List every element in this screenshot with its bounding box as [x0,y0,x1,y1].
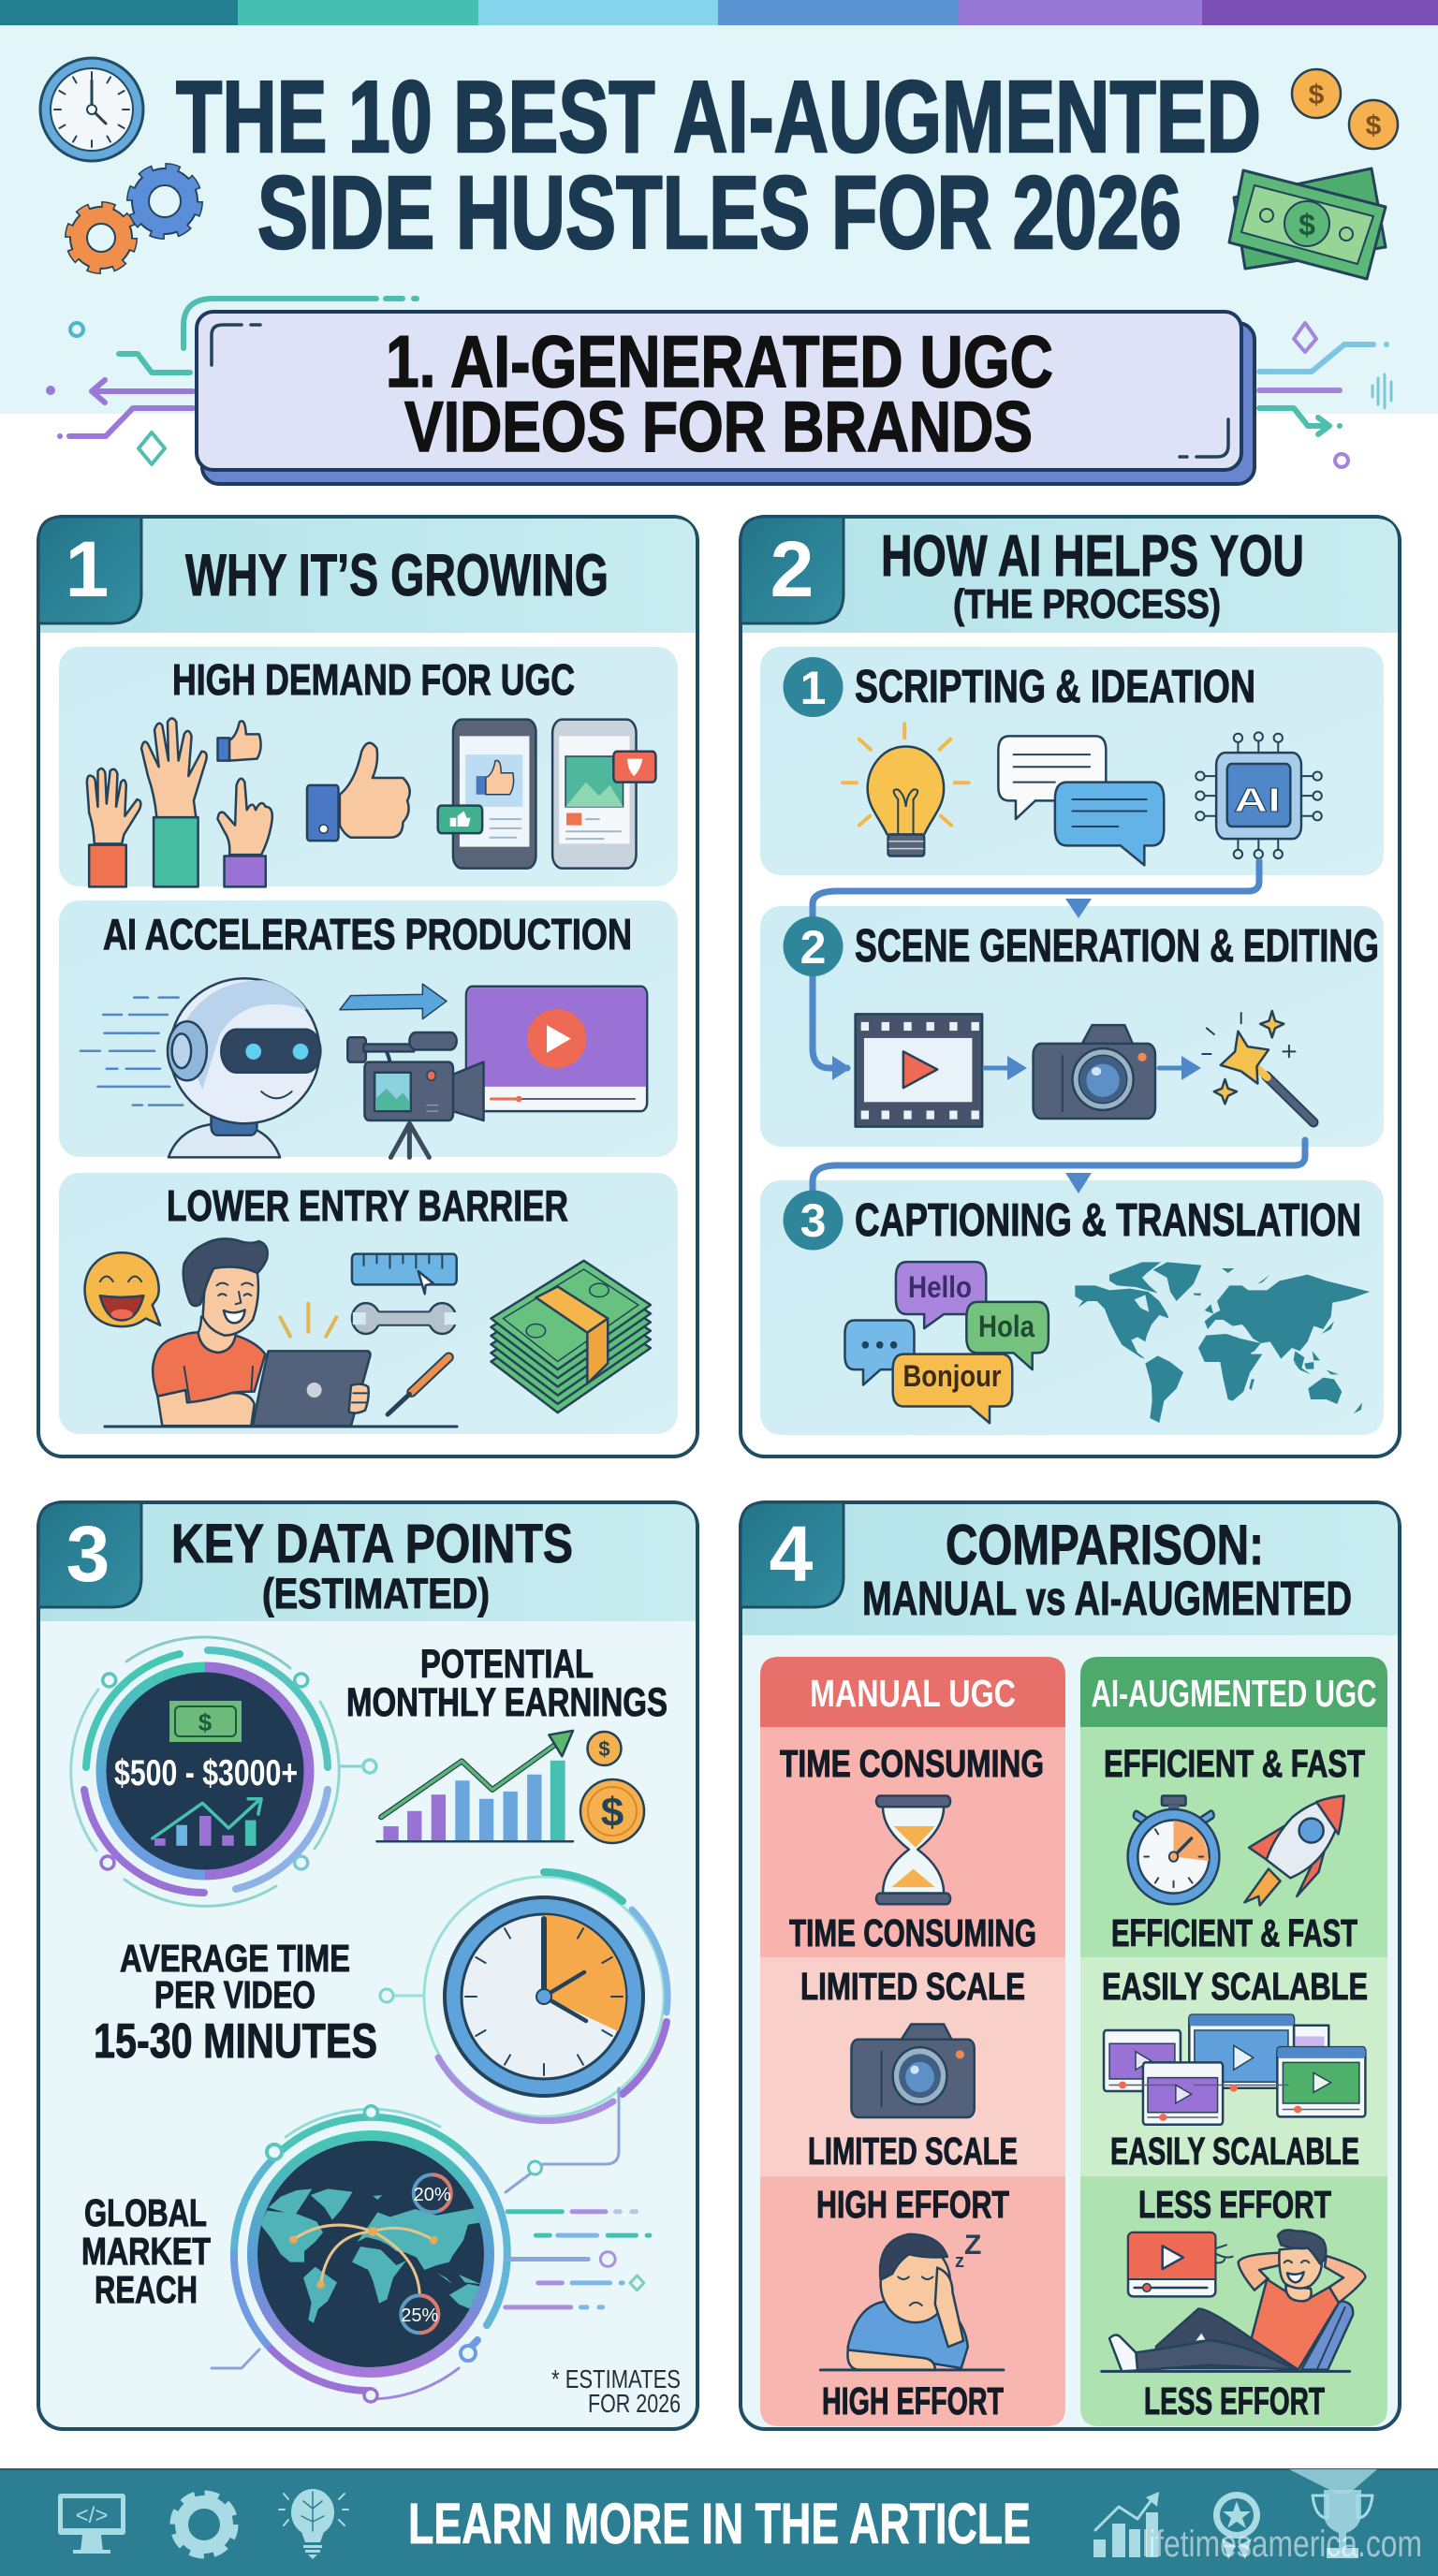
panel 1 header: WHY IT’S GROWING [185,543,609,608]
icon: language speech bubbles: Hola [978,1310,1034,1343]
panel 3 header: 3 [66,1510,110,1598]
icon: video camera on tripod [347,1032,484,1157]
card: scripting and ideation: SCRIPTING & IDEATION [855,662,1255,712]
card: scripting and ideation [760,647,1384,875]
icon: dollar bills: $ [1299,208,1315,242]
footnote [551,2364,681,2418]
icon: wall clock [40,58,143,161]
icon: film strip [856,1014,982,1127]
footer call to action: LEARN MORE IN THE ARTICLE [408,2492,1031,2555]
icon: man at laptop [153,1238,371,1426]
icon: hourglass [876,1796,950,1904]
icon: ruler, wrench and screwdriver [352,1254,458,1414]
icon: tired man: z [955,2251,964,2272]
step badge 3: 3 [800,1194,826,1247]
label: average time per video: PER VIDEO [154,1973,315,2016]
icon: tired man [820,2230,1004,2370]
panel 3 header [38,1502,696,1621]
step badge 2: 2 [800,921,826,973]
panel 2 header: HOW AI HELPS YOU [881,524,1304,589]
clock gauge [380,1872,668,2192]
icon: relaxed man with video [1102,2230,1365,2371]
panel 4 header: 4 [770,1510,814,1598]
circuit decoration left [46,299,417,464]
step badge 3 [783,1191,843,1251]
label: global market reach: REACH [95,2268,198,2311]
icon: code monitor [58,2494,125,2554]
table line [105,1425,457,1428]
label: global market reach: GLOBAL [84,2191,207,2234]
flow arrows between steps [813,861,1305,1193]
icon: coins: $ [1309,80,1325,110]
card: high demand for UGC: HIGH DEMAND FOR UGC [172,655,575,704]
icon: AI chip: AI [1234,781,1281,819]
header background [0,25,1438,414]
stat ring: 25% [401,2295,439,2333]
stat ring: 20%: 20% [414,2185,451,2205]
thick arcs [84,1650,328,1893]
title [176,60,1261,271]
icon: magic wand [1202,1011,1313,1122]
panel 1: why it's growing [38,517,697,1456]
icon: coins: $ [1366,110,1382,141]
column: AI-augmented UGC [1080,1657,1387,2426]
column: manual UGC: MANUAL UGC [810,1672,1016,1715]
top colour bar [0,0,1438,25]
stat ring: 25%: 25% [401,2305,439,2326]
column: manual UGC: HIGH EFFORT [822,2379,1004,2422]
icon: language speech bubbles [844,1262,1049,1423]
column: manual UGC: LIMITED SCALE [800,1965,1025,2008]
icon: dollar bills [1229,168,1386,279]
card: AI accelerates production: AI ACCELERATES PRODUCTION [103,910,632,959]
panel 1 header [38,517,696,633]
outer globe ring [234,2117,507,2391]
subtitle banner: 1. AI-GENERATED UGC [386,320,1053,402]
icon: gold coins: $ [598,1737,610,1761]
icon: growth chart [1093,2492,1159,2557]
icon: AI chip [1196,732,1322,858]
icon: rocket [1244,1796,1344,1906]
card: lower entry barrier: LOWER ENTRY BARRIER [167,1181,568,1230]
icon: gold coins [580,1732,644,1843]
panel 3 header: (ESTIMATED) [262,1570,490,1617]
icon: phones with social posts [438,720,655,869]
icon: tired man: Z [964,2230,981,2261]
icon: footer gear [176,2496,232,2553]
footer bar [0,2468,1438,2576]
subtitle banner: VIDEOS FOR BRANDS [404,388,1033,467]
data lines decoration [506,2212,650,2307]
circuit decoration right [1259,323,1391,467]
step badge 1: 1 [800,662,826,714]
column: manual UGC: HIGH EFFORT [816,2183,1009,2226]
growth bar chart [376,1731,573,1841]
bill icon [169,1701,242,1742]
footnote: * ESTIMATES [551,2364,681,2393]
column: manual UGC: TIME CONSUMING [789,1911,1036,1954]
icon: trophy [1289,2469,1377,2558]
card: AI accelerates production [59,900,678,1157]
two-tone ring [101,1667,205,1875]
column: manual UGC: TIME CONSUMING [780,1742,1044,1785]
icon: speed arrow [340,984,447,1019]
icon: light bulb [843,724,969,856]
footnote: FOR 2026 [588,2389,681,2418]
panel 2: how AI helps you [741,517,1400,1456]
label: average time per video: 15-30 MINUTES [94,2014,377,2069]
world map on globe [260,2188,487,2323]
icon: thumbs up [307,743,410,841]
icon: camera [851,2024,975,2117]
card: captioning and translation [760,1180,1384,1435]
icon: robot [81,978,320,1157]
column: manual UGC [760,1657,1065,2426]
panel 4 header: COMPARISON: [946,1514,1264,1576]
subtitle banner [197,312,1255,484]
panel 1 header: 1 [66,525,109,613]
icon: raised hands [87,718,272,886]
icon: happy emoji bubble [85,1252,160,1326]
icon: video player [466,987,647,1111]
label: potential monthly earnings: POTENTIAL [420,1642,594,1687]
label: global market reach: MARKET [81,2230,211,2273]
card: lower entry barrier [59,1173,678,1434]
icon: gears [70,168,198,269]
card: scene generation and editing [760,906,1384,1147]
earnings badge: $500 - $3000+ [114,1753,298,1793]
panel 2 header: 2 [770,525,814,613]
outer thin arcs [71,1637,339,1906]
panel 3: key data points [38,1502,697,2429]
column: AI-augmented UGC: LESS EFFORT [1144,2379,1325,2422]
label: global market reach [81,2191,211,2311]
column: manual UGC: LIMITED SCALE [808,2130,1018,2173]
icon: stack of cash [491,1261,651,1412]
icon: language speech bubbles: Bonjour [902,1359,1002,1393]
panel 4 header [741,1502,1398,1635]
icon: gold coins: $ [601,1790,624,1836]
icon: world map [1075,1262,1370,1423]
icon: language speech bubbles: Hello [908,1270,972,1304]
label: average time per video [94,1937,377,2069]
icon: multiple video windows [1104,2015,1365,2125]
earnings badge [71,1637,376,1906]
label: average time per video: AVERAGE TIME [120,1937,350,1980]
mini bar chart [153,1799,261,1846]
label: potential monthly earnings [346,1642,668,1725]
label: potential monthly earnings: MONTHLY EARNINGS [346,1680,668,1725]
stat ring: 20% [414,2174,451,2212]
icon: medal [1213,2492,1260,2559]
column: AI-augmented UGC: LESS EFFORT [1138,2183,1331,2226]
icon: coins [1292,69,1398,149]
panel 3 header: KEY DATA POINTS [171,1514,573,1574]
step badge 1 [783,657,843,717]
global reach globe [212,2106,507,2402]
icon: brain light bulb [279,2489,348,2559]
panel 4: comparison [741,1502,1400,2429]
step badge 2 [783,916,843,976]
icon: code monitor: </> [76,2503,108,2528]
panel 2 header: (THE PROCESS) [953,581,1221,627]
bill icon: $ [198,1708,213,1736]
icon: chat bubbles [998,736,1164,865]
icon: photo camera [1034,1025,1155,1119]
panel 2 header [741,517,1398,633]
icon: stopwatch [1128,1796,1219,1904]
card: high demand for UGC [59,647,678,886]
